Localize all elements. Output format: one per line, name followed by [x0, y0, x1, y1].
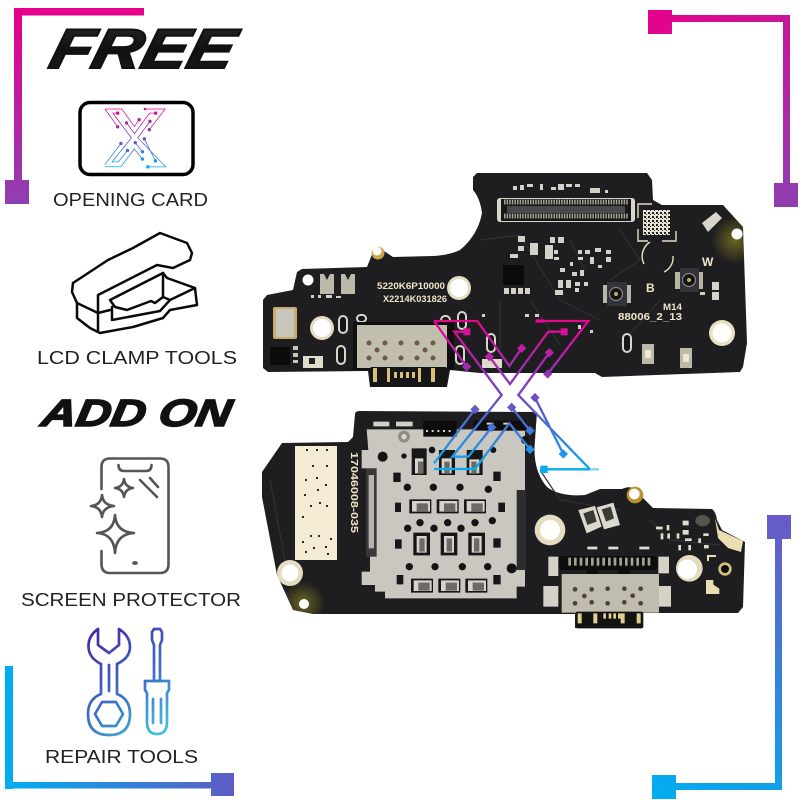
icon: screen protector phone	[91, 458, 168, 573]
silkscreen text: top board: M14	[663, 302, 682, 312]
heading: ADD ON: ADD ON	[37, 392, 237, 435]
board outline top	[263, 173, 747, 387]
board outline bottom	[262, 411, 745, 628]
label: opening card: OPENING CARD	[53, 190, 208, 210]
RF connector right	[675, 268, 703, 292]
parts right of notch	[535, 487, 732, 628]
gold contact strip	[295, 446, 337, 560]
frame corner: top right	[648, 10, 798, 207]
RF connector left	[603, 282, 631, 306]
icon: LCD clamp tool	[72, 233, 197, 333]
SIM tray metal	[362, 421, 529, 598]
label: screen protector: SCREEN PROTECTOR	[21, 590, 241, 610]
small chip cluster	[270, 295, 502, 368]
silkscreen text: top board: W	[702, 255, 714, 269]
silkscreen text: top board: 88006_2_13	[618, 312, 682, 323]
frame corner: bottom right	[652, 515, 791, 799]
connector pins	[370, 367, 447, 387]
logo: circuit X overlay	[434, 321, 599, 473]
oval pads	[337, 312, 631, 364]
flex connector	[497, 198, 635, 222]
QR code marking	[638, 204, 676, 241]
heading: FREE: FREE	[44, 19, 245, 81]
silkscreen text: top board: X2214K031826	[383, 294, 447, 304]
surface components	[482, 184, 719, 333]
gold edge strip and right end pads	[707, 518, 743, 561]
black chip	[503, 265, 524, 285]
frame corner: top left	[5, 8, 144, 204]
label: repair tools: REPAIR TOOLS	[45, 747, 198, 767]
icon: wrench and screwdriver	[88, 629, 169, 735]
frame corner: bottom left	[5, 666, 234, 796]
circuit board: top view	[263, 173, 759, 387]
silkscreen text: top board: B	[646, 281, 655, 295]
icon: opening card	[80, 102, 193, 174]
circuit board: bottom view	[262, 411, 745, 628]
mounting holes	[302, 228, 742, 346]
mounting hole bottom left	[277, 560, 309, 609]
gold strip dots	[302, 449, 332, 555]
microphone module	[273, 307, 297, 339]
charging port plate	[353, 322, 454, 370]
silver spring pads	[320, 274, 692, 368]
silkscreen text: bottom board: 17046008-035	[348, 452, 360, 533]
silkscreen arcs	[642, 242, 673, 272]
silkscreen text: top board	[377, 255, 714, 323]
silkscreen text: top board: 5220K6P10000	[377, 281, 445, 291]
label: LCD clamp tools: LCD CLAMP TOOLS	[37, 348, 237, 368]
